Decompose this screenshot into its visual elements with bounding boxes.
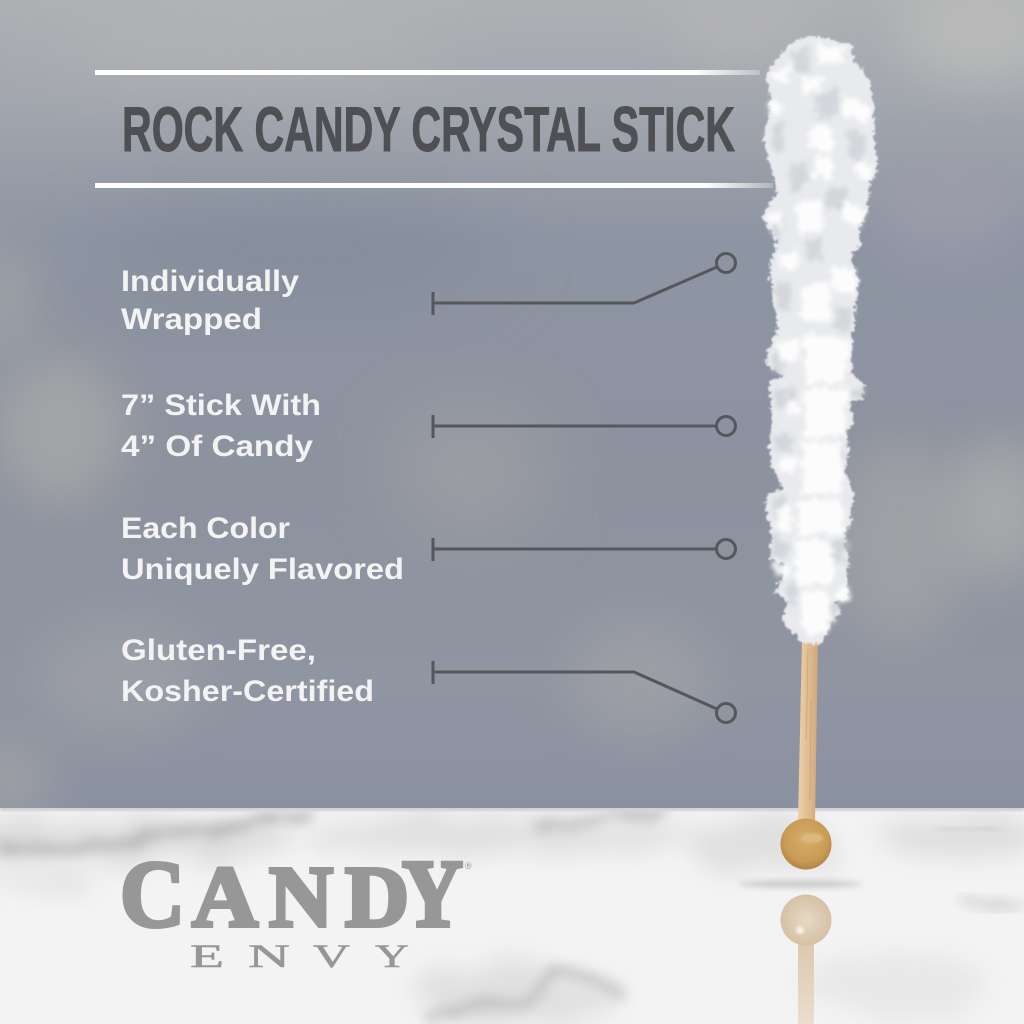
bottom title rule [95, 183, 773, 188]
feature 3: flavors [121, 512, 736, 586]
feature 2 callout line [433, 415, 736, 438]
logo wordmark: Y [402, 840, 463, 947]
logo subtitle: N [248, 939, 290, 975]
feature 1 label: Wrapped [121, 303, 262, 336]
logo wordmark: D [345, 848, 409, 945]
feature 4 callout line [433, 661, 736, 722]
feature 2 label: 7” Stick With [121, 389, 321, 422]
feature 3 label: Each Color [121, 512, 290, 545]
logo wordmark [120, 840, 463, 947]
registered mark: ® [465, 861, 472, 871]
top title rule [95, 70, 760, 75]
logo wordmark: A [192, 848, 258, 945]
feature 4 label: Kosher-Certified [121, 675, 374, 708]
feature 2: stick size [121, 389, 736, 463]
logo subtitle [190, 939, 409, 975]
rock candy crystals [759, 33, 875, 642]
crystal facets: shaded [768, 45, 862, 622]
feature 4: certifications [121, 634, 736, 722]
title block [95, 70, 773, 188]
marble table surface [0, 806, 1024, 1024]
logo subtitle: E [190, 939, 224, 975]
crystal facets: highlights [762, 40, 872, 636]
reflection of stick [780, 894, 832, 1024]
feature 3 label: Uniquely Flavored [121, 553, 404, 586]
feature 1: individually wrapped [121, 254, 736, 336]
crystal silhouette [759, 33, 875, 642]
logo subtitle: Y [375, 939, 409, 975]
feature 1 label: Individually [121, 265, 299, 298]
wooden stick [798, 640, 818, 820]
feature 3 callout line [433, 538, 736, 561]
logo wordmark: C [120, 841, 185, 947]
logo subtitle: V [313, 939, 350, 975]
feature 4 label: Gluten-Free, [121, 634, 316, 667]
feature 1 callout line [433, 254, 736, 315]
ball shadow [738, 880, 862, 888]
wooden ball [780, 818, 832, 870]
logo: Candy Envy [120, 840, 472, 975]
feature 2 label: 4” Of Candy [121, 430, 313, 463]
logo wordmark: N [269, 848, 333, 945]
